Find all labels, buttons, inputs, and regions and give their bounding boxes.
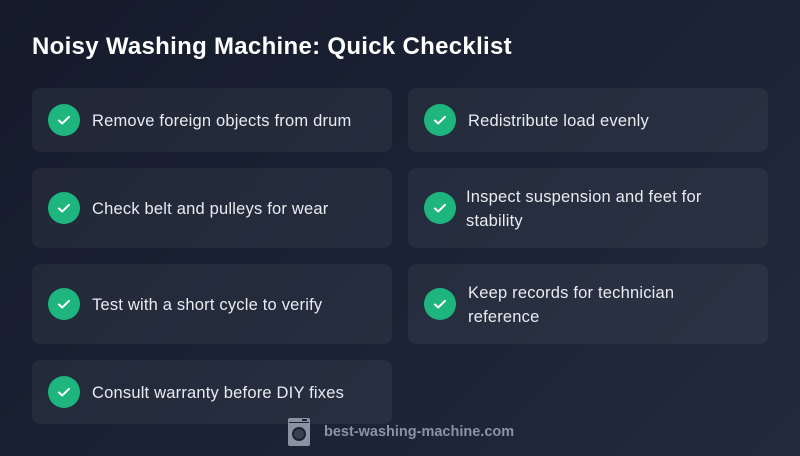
card: keep records: Keep records for technician reference xyxy=(468,284,674,326)
card: test short cycle: Test with a short cycle to verify xyxy=(92,296,322,314)
footer brand: best-washing-machine.com xyxy=(324,424,514,440)
card: keep records xyxy=(408,264,768,344)
icon: washing machine xyxy=(288,418,310,446)
card: remove foreign objects: Remove foreign objects from drum xyxy=(92,112,352,130)
card: remove foreign objects xyxy=(32,88,392,152)
card: redistribute load xyxy=(408,88,768,152)
card: consult warranty xyxy=(32,360,392,424)
card: check belt xyxy=(32,168,392,248)
card: check belt: Check belt and pulleys for wear xyxy=(92,200,328,218)
card: consult warranty: Consult warranty before DIY fixes xyxy=(92,384,344,402)
title: Noisy Washing Machine: Quick Checklist xyxy=(32,33,512,60)
card: inspect suspension xyxy=(408,168,768,248)
footer brand xyxy=(288,418,514,446)
card: test short cycle xyxy=(32,264,392,344)
card: redistribute load: Redistribute load evenly xyxy=(468,112,649,130)
card: inspect suspension: Inspect suspension and feet for stability xyxy=(466,188,702,230)
